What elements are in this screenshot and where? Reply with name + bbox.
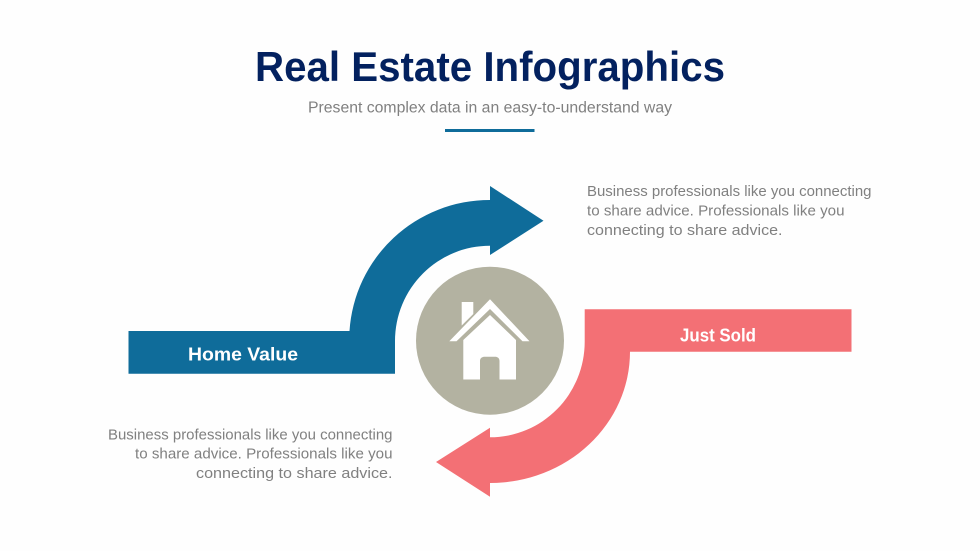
text block: bottom left: connecting to share advice. (196, 465, 392, 482)
subtitle: Present complex data in an easy-to-understand way (308, 100, 672, 116)
text block: bottom left: to share advice. Professionals like you (135, 446, 392, 462)
text block: top right: connecting to share advice. (587, 222, 782, 239)
text block: top right: to share advice. Professionals like you (587, 202, 844, 220)
text block: top right (587, 183, 872, 239)
label: Just Sold: Just Sold (680, 324, 756, 346)
center circle with house icon (416, 267, 564, 415)
title underline (445, 129, 534, 132)
icon: house (449, 299, 530, 380)
pink arrow: Just Sold (436, 309, 852, 497)
blue arrow: Home Value (128, 186, 544, 374)
label: Home Value: Home Value (188, 344, 298, 364)
title: Real Estate Infographics (255, 43, 725, 90)
text block: top right: Business professionals like you connecting (587, 183, 872, 200)
text block: bottom left (108, 426, 392, 482)
text block: bottom left: Business professionals like you connecting (108, 426, 392, 444)
